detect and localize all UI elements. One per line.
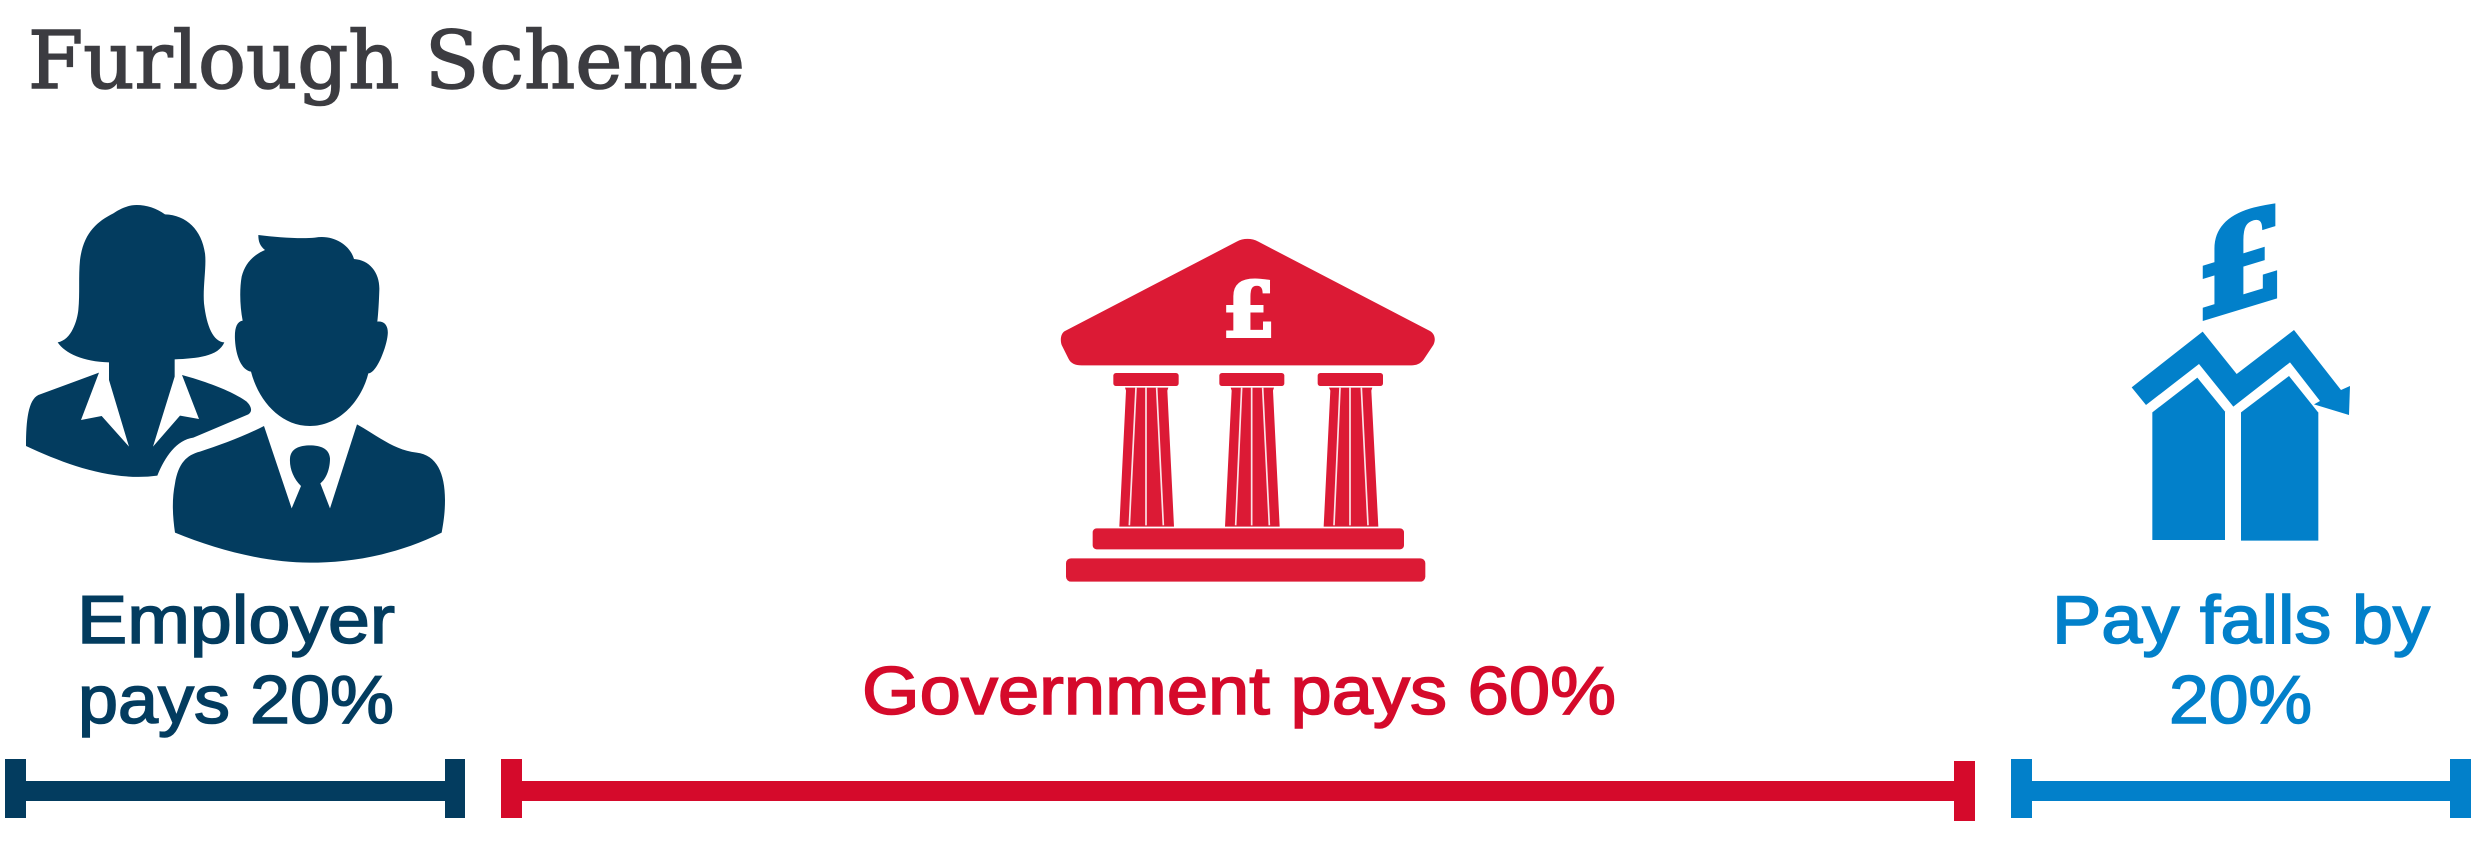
title: Furlough Scheme xyxy=(28,14,745,107)
column flutes xyxy=(1129,388,1368,525)
falling arrow xyxy=(2132,330,2350,415)
pound sign on roof: £ xyxy=(1222,265,1275,354)
label: pay falls by 20%: Pay falls by xyxy=(2052,582,2430,658)
man suit xyxy=(173,424,445,563)
upper step xyxy=(1093,528,1404,549)
lower step xyxy=(1066,558,1425,582)
label: employer pays 20% xyxy=(77,582,395,738)
man head xyxy=(235,235,388,426)
woman silhouette xyxy=(26,205,251,477)
label: employer pays 20%: pays 20% xyxy=(78,662,394,738)
bracket: pay fall share xyxy=(2011,759,2471,818)
icon: government bank building xyxy=(1061,239,1435,582)
slanted pound sign: £ xyxy=(2197,177,2283,349)
label: pay falls by 20%: 20% xyxy=(2169,662,2312,738)
icon: employer man and woman xyxy=(26,205,445,563)
column capitals xyxy=(1113,373,1383,386)
label: government pays 60%: Government pays 60% xyxy=(862,653,1616,729)
right bar xyxy=(2241,376,2318,541)
column shafts xyxy=(1119,388,1378,527)
icon: pay falling chart with pound xyxy=(2132,177,2350,541)
left bar xyxy=(2152,378,2225,540)
bank roof xyxy=(1061,239,1435,365)
bracket: government share xyxy=(501,759,1975,821)
bracket: employer share xyxy=(5,759,465,818)
label: employer pays 20%: Employer xyxy=(77,582,395,658)
label: pay falls by 20% xyxy=(2052,582,2430,738)
